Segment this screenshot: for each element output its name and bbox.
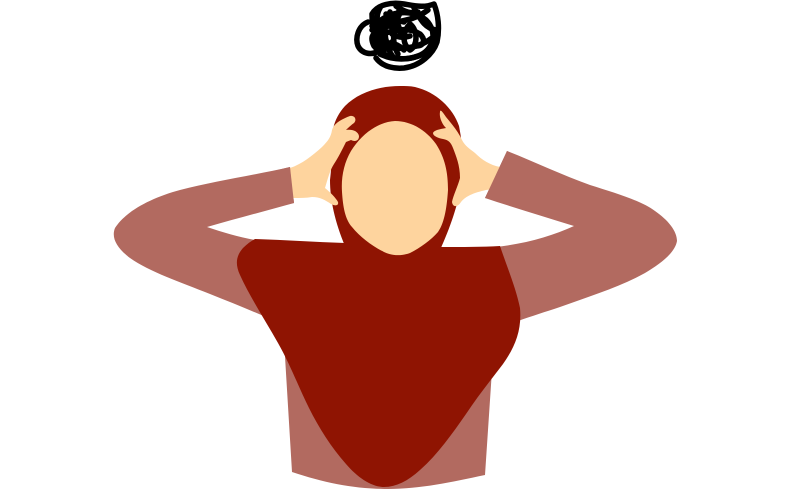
left hand	[290, 116, 359, 205]
hijab head	[330, 86, 462, 250]
scribble above head	[357, 3, 438, 68]
left arm	[114, 167, 294, 318]
right arm	[485, 151, 677, 321]
face	[342, 121, 448, 255]
left sleeve cuff	[270, 167, 294, 208]
hijab drape	[237, 239, 520, 487]
right sleeve cuff	[485, 151, 530, 205]
torso	[284, 340, 492, 489]
right hand	[433, 111, 500, 206]
